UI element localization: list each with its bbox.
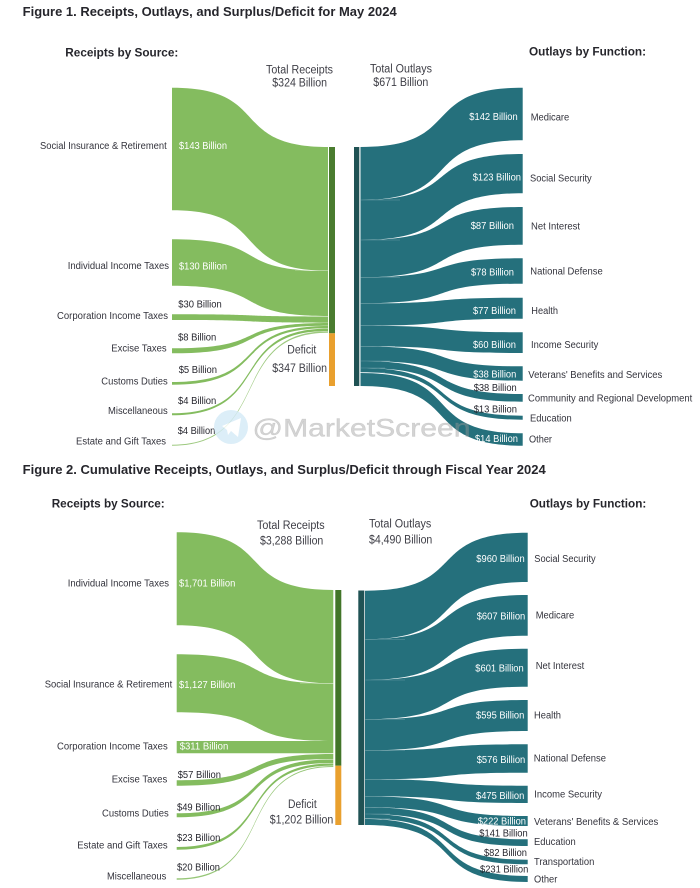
outlay values and function names: Community and Regional Development (528, 393, 693, 404)
flow: estate and gift taxes: $4 Billion (178, 426, 215, 437)
flow: individual income taxes (68, 532, 333, 683)
outlay values and function names: Health (531, 306, 558, 317)
flow: social insurance and retirement: $143 Billion (179, 141, 227, 152)
flow: excise taxes (111, 323, 328, 354)
flow: national defense (365, 744, 528, 779)
flow: social insurance and retirement (40, 88, 328, 271)
outlay values and function names: $38 Billion (474, 383, 517, 394)
outlay values and function names: National Defense (530, 267, 603, 278)
total receipts label: $3,288 Billion (260, 535, 323, 547)
flow: social insurance and retirement: $1,127 Billion (179, 680, 235, 691)
panel: figure 1 outlays by function (354, 44, 693, 446)
bar: deficit (335, 766, 341, 825)
flow: excise taxes (112, 754, 333, 786)
outlay values and function names: $475 Billion (476, 791, 524, 802)
outlay values and function names: Income Security (531, 340, 598, 351)
outlay values and function names: Veterans' Benefits & Services (534, 817, 658, 828)
outlay values and function names: Medicare (531, 113, 570, 124)
flow: net interest (365, 649, 528, 719)
outlay values and function names: $231 Billion (480, 864, 528, 875)
bar: total receipts (335, 590, 341, 766)
outlay values and function names: Medicare (536, 611, 575, 622)
deficit label (270, 799, 333, 827)
flow: estate and gift taxes (76, 331, 328, 447)
outlay values and function names: $142 Billion (469, 112, 518, 123)
total outlays label: Total Outlays (370, 64, 432, 76)
heading: outlays by function: Outlays by Function: (530, 497, 646, 511)
bar: deficit (329, 333, 335, 386)
flow: corporation income taxes: $311 Billion (180, 742, 228, 753)
flow: social insurance and retirement: Social Insurance & Retirement (40, 141, 167, 152)
total outlays label (369, 519, 432, 547)
deficit label: Deficit (288, 799, 317, 811)
bar: total outlays (358, 590, 364, 825)
flow: estate and gift taxes: Estate and Gift Taxes (77, 841, 168, 852)
outlay values and function names (469, 112, 693, 445)
flow: individual income taxes (68, 239, 328, 316)
flow: miscellaneous: $4 Billion (178, 396, 216, 407)
deficit label: Deficit (287, 344, 317, 356)
flow: excise taxes: Excise Taxes (112, 775, 167, 786)
flow: estate and gift taxes: $23 Billion (177, 833, 220, 844)
watermark: marketscreener text: @MarketScreen (252, 414, 470, 442)
outlay values and function names: $77 Billion (473, 306, 516, 317)
outlay values and function names: Net Interest (531, 221, 580, 232)
total outlays label: $4,490 Billion (369, 535, 432, 547)
flow: health (365, 700, 528, 750)
outlay values and function names: Education (530, 413, 572, 424)
outlay values and function names: Education (534, 837, 576, 848)
panel: figure 2 outlays by function (358, 497, 658, 885)
flow: individual income taxes: Individual Income Taxes (68, 261, 169, 272)
flow: education (365, 807, 528, 846)
flow: net interest (360, 207, 523, 277)
outlay values and function names: Veterans' Benefits and Services (528, 370, 662, 381)
outlay values and function names: Net Interest (536, 661, 584, 672)
outlay values and function names: $123 Billion (473, 173, 521, 184)
flow: miscellaneous (108, 329, 328, 417)
flow: estate and gift taxes (77, 763, 333, 852)
flow: miscellaneous: Miscellaneous (108, 406, 168, 417)
flow: corporation income taxes: $30 Billion (178, 300, 222, 311)
bar: total receipts (329, 147, 335, 333)
flow: customs duties (101, 326, 328, 387)
flow: estate and gift taxes: Estate and Gift Taxes (76, 436, 166, 447)
heading: outlays by function: Outlays by Function: (529, 44, 646, 58)
watermark: telegram icon (214, 410, 248, 444)
flow: customs duties: Customs Duties (102, 808, 169, 819)
total outlays label: Total Outlays (369, 519, 432, 531)
flow: income security (360, 326, 523, 353)
outlay values and function names: $38 Billion (473, 370, 516, 381)
title: figure 2: Figure 2. Cumulative Receipts, Outlays, and Surplus/Deficit through Fiscal Year 2024 (23, 463, 546, 477)
outlay values and function names: $601 Billion (475, 663, 524, 674)
outlay values and function names: $13 Billion (474, 404, 517, 415)
flow: miscellaneous (107, 766, 333, 883)
outlay values and function names: $14 Billion (475, 434, 518, 445)
outlay values and function names: National Defense (534, 753, 606, 764)
flow: other (360, 373, 523, 446)
flow: social insurance and retirement (45, 654, 333, 741)
flow: other (365, 819, 528, 882)
outlay values and function names: Income Security (534, 790, 602, 801)
flow: corporation income taxes (57, 300, 328, 323)
flow: corporation income taxes: Corporation Income Taxes (57, 311, 168, 322)
outlay values and function names: Transportation (534, 857, 594, 868)
outlay values and function names: $607 Billion (477, 611, 525, 622)
total receipts label: Total Receipts (266, 64, 333, 76)
heading: receipts by source: Receipts by Source: (52, 497, 165, 511)
outlay values and function names: $595 Billion (476, 711, 524, 722)
flow: social security (360, 154, 523, 240)
outlay values and function names: Social Security (530, 174, 592, 185)
flow: veterans benefits and services (360, 346, 523, 381)
flow: community and regional development (360, 361, 523, 402)
outlay values and function names: $87 Billion (471, 221, 514, 232)
flow: medicare (360, 88, 523, 200)
flow: veterans benefits and services (365, 796, 528, 826)
outlay values and function names: $960 Billion (476, 554, 525, 565)
flow: income security (365, 779, 528, 803)
outlay values and function names: $60 Billion (473, 340, 516, 351)
flow: corporation income taxes (57, 741, 333, 753)
total receipts label: $324 Billion (272, 77, 327, 89)
total outlays label: $671 Billion (373, 77, 428, 89)
outlay values and function names: $222 Billion (478, 817, 526, 828)
flow: social security (365, 533, 528, 639)
flow: customs duties: Customs Duties (101, 376, 168, 387)
deficit label: $347 Billion (272, 363, 327, 375)
outlay values and function names: Other (529, 434, 553, 445)
flow: medicare (365, 595, 528, 680)
total receipts label (266, 64, 333, 89)
flow: transportation (365, 814, 528, 864)
flow: excise taxes: $57 Billion (178, 770, 221, 781)
deficit label: $1,202 Billion (270, 815, 333, 827)
flow: health (360, 298, 523, 326)
flow: excise taxes: Excise Taxes (111, 343, 167, 354)
heading: receipts by source: Receipts by Source: (65, 46, 178, 60)
flow: miscellaneous: Miscellaneous (107, 872, 166, 883)
panel: figure 1 receipts by source (40, 46, 335, 447)
outlay values and function names (475, 554, 658, 885)
flow: customs duties (102, 759, 333, 819)
flow: customs duties: $49 Billion (177, 802, 220, 813)
title: figure 1: Figure 1. Receipts, Outlays, and Surplus/Deficit for May 2024 (23, 5, 397, 19)
outlay values and function names: $82 Billion (484, 848, 527, 859)
outlay values and function names: Other (534, 874, 558, 885)
panel: figure 2 receipts by source (45, 497, 341, 883)
total receipts label (257, 520, 325, 547)
outlay values and function names: $576 Billion (477, 755, 525, 766)
flow: miscellaneous: $20 Billion (177, 863, 220, 874)
outlay values and function names: $141 Billion (479, 828, 528, 839)
outlay values and function names: Social Security (534, 554, 596, 565)
bar: total outlays (354, 147, 359, 386)
flow: individual income taxes: Individual Income Taxes (68, 578, 169, 589)
flow: individual income taxes: $130 Billion (179, 261, 227, 272)
outlay values and function names: $78 Billion (471, 267, 514, 278)
outlay values and function names: Health (534, 711, 561, 722)
flow: education (360, 368, 523, 420)
flow: social insurance and retirement: Social Insurance & Retirement (45, 680, 172, 691)
total receipts label: Total Receipts (257, 520, 325, 532)
flow: customs duties: $5 Billion (179, 365, 217, 376)
flow: corporation income taxes: Corporation Income Taxes (57, 742, 168, 753)
deficit label (272, 344, 327, 375)
flow: excise taxes: $8 Billion (178, 333, 216, 344)
total outlays label (370, 64, 432, 89)
flow: individual income taxes: $1,701 Billion (179, 578, 235, 589)
flow: national defense (360, 258, 523, 303)
